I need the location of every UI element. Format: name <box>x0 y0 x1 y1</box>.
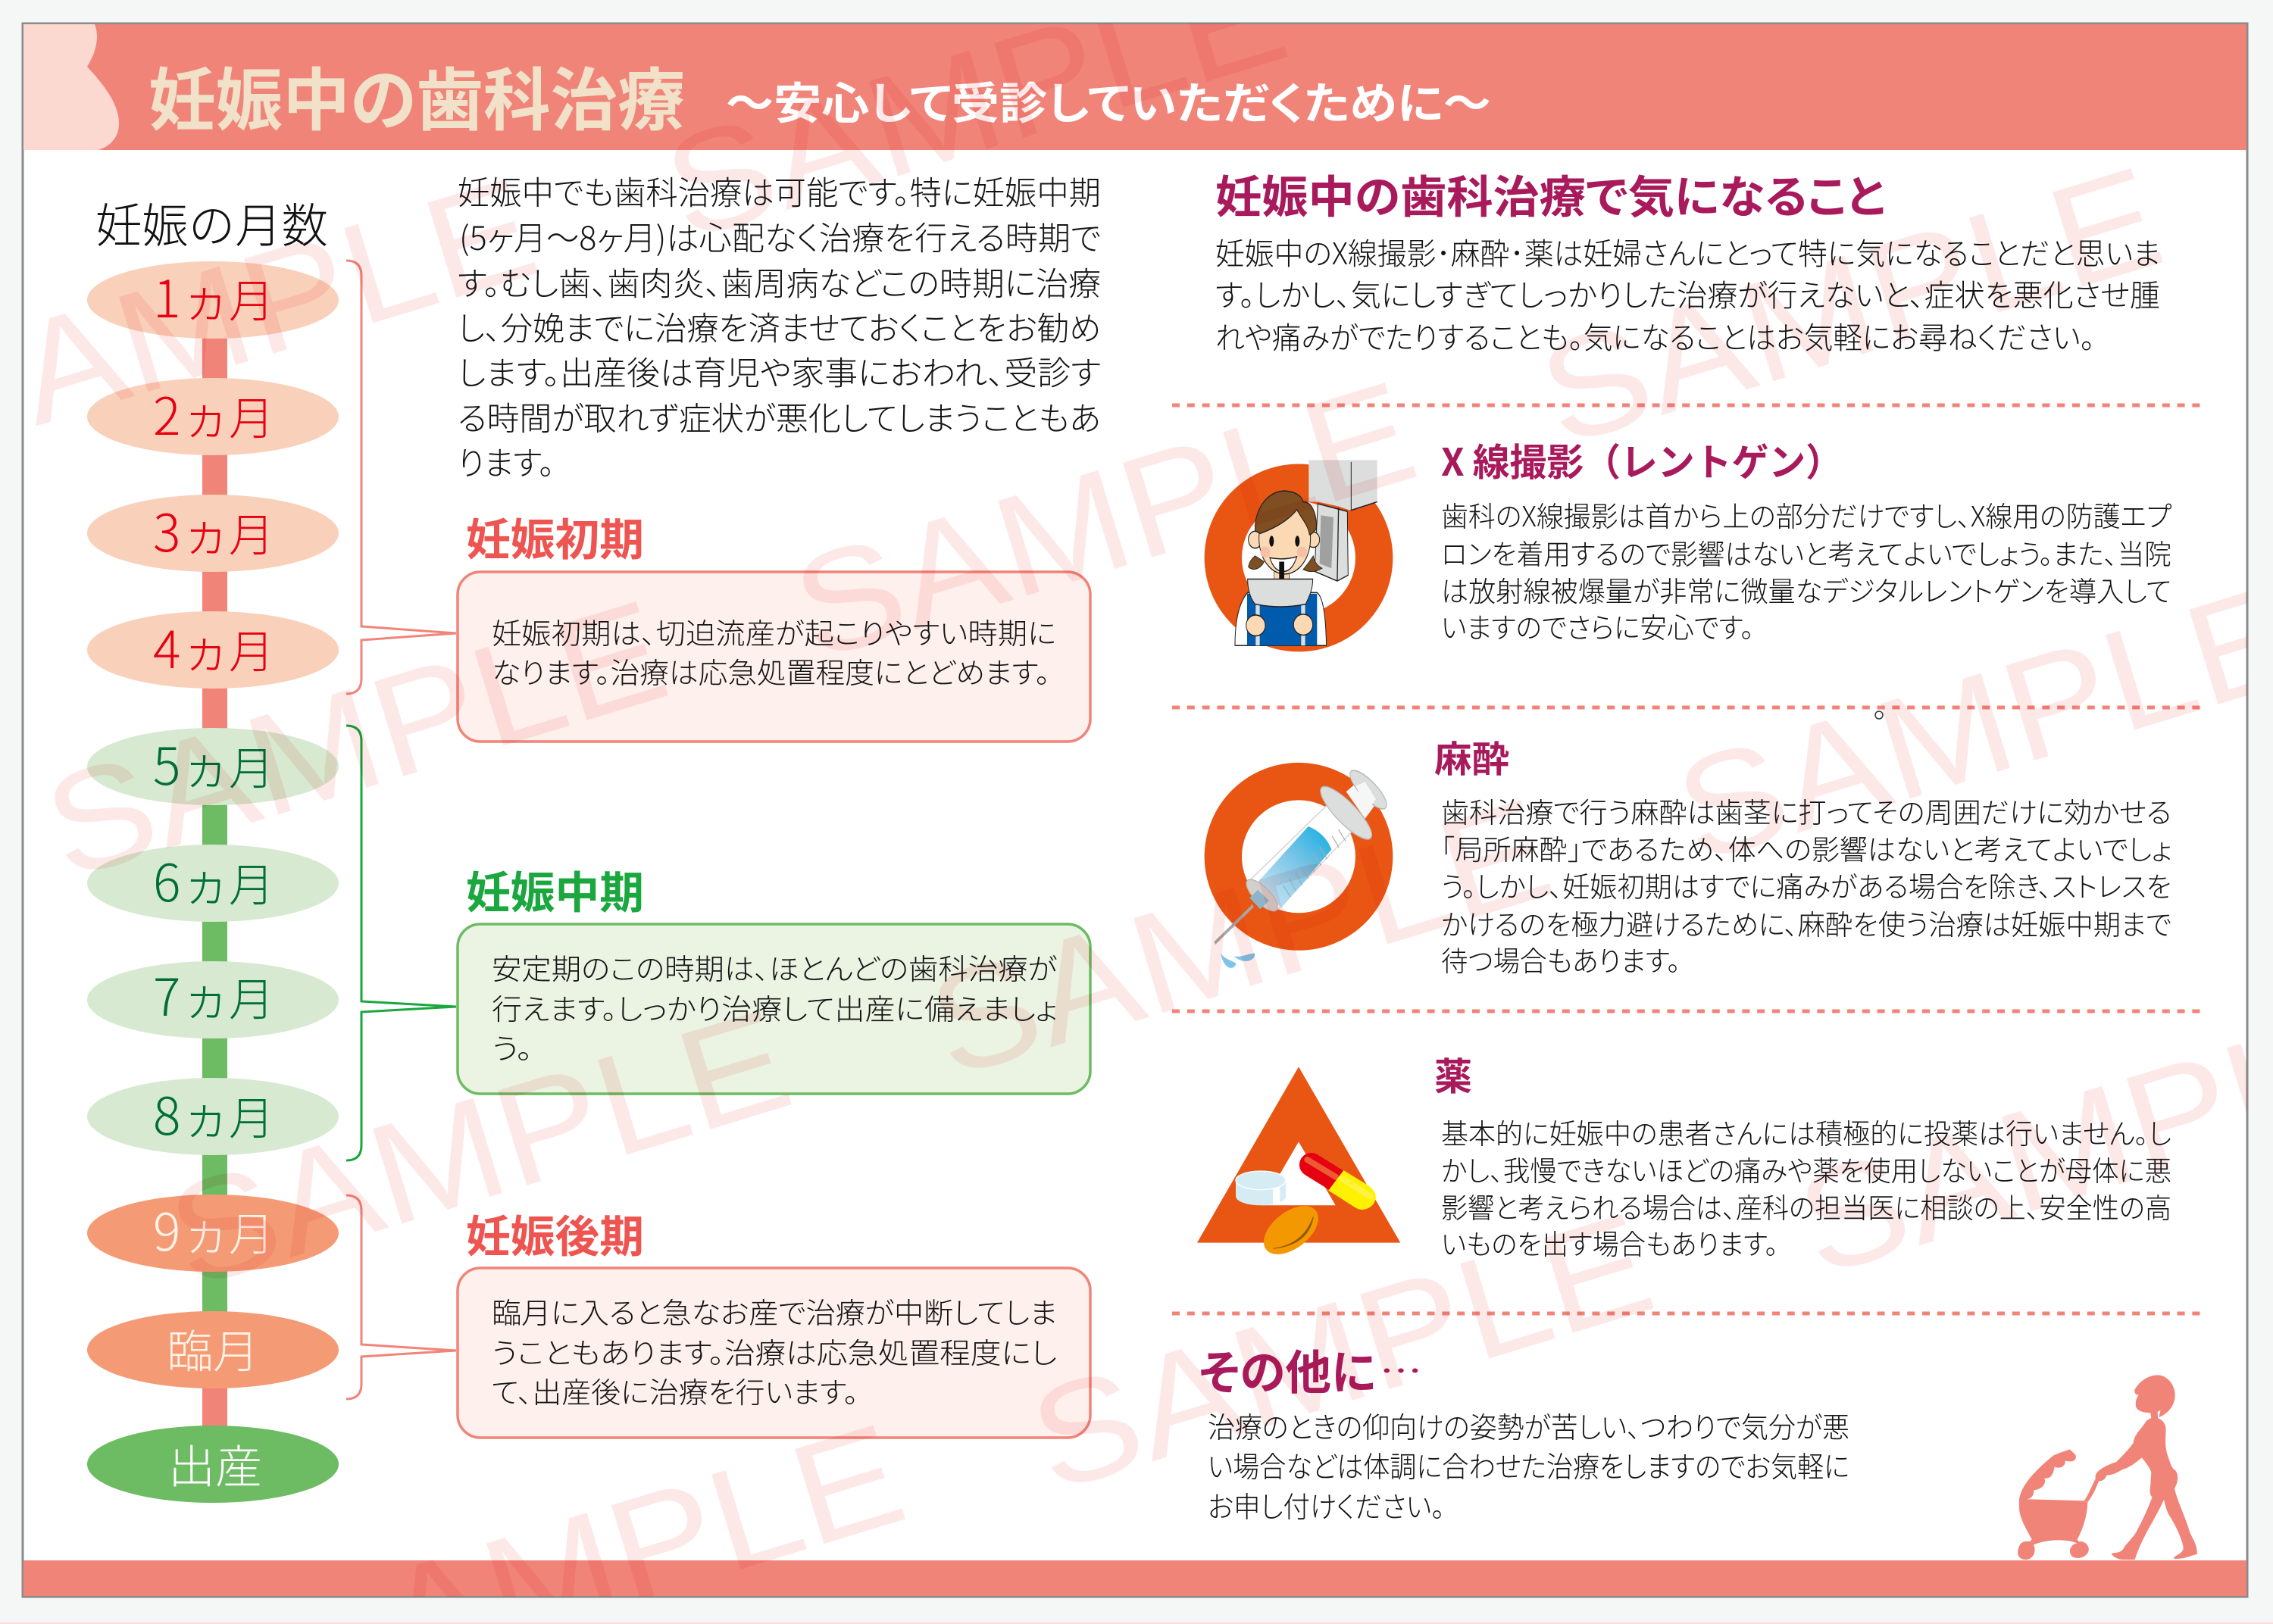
timeline spine <box>202 318 227 1439</box>
heading: concerns: 妊娠中の歯科治療で気になること <box>1215 161 1885 226</box>
callout text: early pregnancy <box>492 611 1056 692</box>
text: anesthesia <box>1441 790 2171 979</box>
heading: x-ray: X 線撮影（レントゲン） <box>1441 433 1843 487</box>
text: anesthesia: 歯科治療で行う麻酔は歯茎に打ってその周囲だけに効かせる <box>1441 790 2171 831</box>
icon: medicine with triangle <box>1197 1067 1400 1264</box>
month ovals: first trimester: 2 <box>153 375 180 450</box>
month ovals: first trimester: 4 <box>153 608 180 683</box>
footer band <box>23 1560 2246 1596</box>
heading: medicine: 薬 <box>1434 1047 1472 1101</box>
bracket: first trimester <box>346 261 456 694</box>
month ovals: second trimester: 月 <box>229 732 274 798</box>
month ovals: third trimester and birth: 出産 <box>168 1431 262 1497</box>
intro paragraph: (5ヶ月～8ヶ月)は心配なく治療を行える時期で <box>459 213 1101 260</box>
month ovals: third trimester and birth: 月 <box>229 1198 274 1264</box>
text: medicine <box>1441 1111 2171 1263</box>
intro paragraph: る時間が取れず症状が悪化してしまうこともあ <box>458 393 1101 440</box>
text: medicine: かし、我慢できないほどの痛みや薬を使用しないことが母体に悪 <box>1441 1148 2171 1189</box>
month ovals: third trimester and birth: 臨月 <box>167 1316 259 1382</box>
callout text: early pregnancy: なります。治療は応急処置程度にとどめます。 <box>492 650 1050 692</box>
month ovals: second trimester: 5 <box>153 725 180 800</box>
month ovals: second trimester: 月 <box>229 963 274 1029</box>
right section: concerns intro <box>1215 161 2160 358</box>
callout text: late pregnancy: 臨月に入ると急なお産で治療が中断してしま <box>492 1290 1057 1332</box>
panel: early pregnancy <box>458 504 1090 742</box>
heading ellipsis: … <box>1380 1344 1422 1393</box>
subtitle: ～安心して受診していただくために～ <box>726 68 1491 132</box>
text: x-ray: ロンを着用するので影響はないと考えてよいでしょう。また、当院 <box>1441 532 2171 573</box>
callout text: mid pregnancy <box>492 946 1057 1067</box>
month ovals: second trimester: ヵ <box>182 1079 230 1149</box>
text: anesthesia: かけるのを極力避けるために、麻酔を使う治療は妊娠中期まで <box>1441 902 2171 943</box>
month ovals: second trimester: 7 <box>153 956 180 1031</box>
callout text: mid pregnancy: 安定期のこの時期は、ほとんどの歯科治療が <box>492 946 1057 988</box>
heading: other: その他に <box>1199 1335 1376 1403</box>
month ovals: first trimester: 月 <box>229 499 274 565</box>
watermark: SAMPLE repeated: SAMPLE <box>1523 136 2178 476</box>
month ovals: first trimester: 月 <box>229 265 274 331</box>
small stray circle mark <box>1875 711 1883 719</box>
watermark: SAMPLE repeated: SAMPLE <box>777 351 1432 690</box>
callout text: late pregnancy: て、出産後に治療を行います。 <box>492 1369 858 1411</box>
intro paragraph: 妊娠中でも歯科治療は可能です。特に妊娠中期 <box>458 167 1101 214</box>
text: x-ray: いますのでさらに安心です。 <box>1441 605 1754 646</box>
callout text: late pregnancy <box>492 1290 1057 1411</box>
watermark: SAMPLE repeated: SAMPLE <box>28 570 683 909</box>
watermark: SAMPLE repeated: SAMPLE <box>152 979 807 1318</box>
section: medicine <box>1434 1047 2171 1263</box>
intro paragraph: します。出産後は育児や家事におわれ、受診す <box>458 348 1101 395</box>
icon: syringe with circle <box>1205 763 1393 968</box>
concerns text: 妊娠中のX線撮影･麻酔･薬は妊婦さんにとって特に気になることだと思いま <box>1215 230 2160 273</box>
icon: woman pushing stroller silhouette <box>2018 1375 2197 1560</box>
callout text: late pregnancy: うこともあります。治療は応急処置程度にし <box>492 1330 1057 1372</box>
intro paragraph: ります。 <box>458 438 555 485</box>
month ovals: second trimester: 8 <box>153 1075 180 1150</box>
text: anesthesia: 待つ場合もあります。 <box>1441 938 1681 979</box>
concerns text: れや痛みがでたりすることも。気になることはお気軽にお尋ねください。 <box>1215 314 2095 358</box>
month ovals: second trimester: ヵ <box>182 729 230 799</box>
section: x-ray <box>1441 433 2172 646</box>
heading: late pregnancy: 妊娠後期 <box>466 1201 644 1265</box>
text: x-ray: は放射線被爆量が非常に微量なデジタルレントゲンを導入して <box>1441 569 2171 610</box>
intro paragraph: し、分娩までに治療を済ませておくことをお勧め <box>458 303 1101 350</box>
section: other <box>1199 1335 1849 1526</box>
bracket: third trimester <box>346 1195 456 1399</box>
watermark: SAMPLE repeated: SAMPLE <box>1659 554 2273 893</box>
callout box: early pregnancy <box>458 572 1090 742</box>
section: anesthesia <box>1434 729 2171 979</box>
callout text: early pregnancy: 妊娠初期は、切迫流産が起こりやすい時期に <box>492 611 1056 652</box>
panel: late pregnancy <box>458 1201 1090 1438</box>
heading: early pregnancy: 妊娠初期 <box>466 504 644 568</box>
callout text: mid pregnancy: 行えます。しっかり治療して出産に備えましょ <box>492 986 1057 1028</box>
intro paragraph <box>458 167 1101 485</box>
watermark: SAMPLE repeated: SAMPLE <box>1014 1182 1669 1522</box>
month ovals: first trimester: 1 <box>153 258 180 333</box>
month ovals: second trimester <box>87 725 339 1155</box>
month ovals: first trimester: ヵ <box>182 613 230 682</box>
watermark: SAMPLE repeated: SAMPLE <box>912 768 1568 1107</box>
text: anesthesia: う。しかし、妊娠初期はすでに痛みがある場合を除き、ストレスを <box>1441 864 2171 905</box>
text: other: い場合などは体調に合わせた治療をしますのでお気軽に <box>1208 1444 1849 1485</box>
text: other: 治療のときの仰向けの姿勢が苦しい、つわりで気分が悪 <box>1208 1404 1849 1446</box>
month ovals: second trimester: 月 <box>229 1082 274 1148</box>
intro paragraph: す。むし歯、歯肉炎、歯周病などこの時期に治療 <box>458 258 1101 305</box>
month ovals: first trimester: ヵ <box>182 496 230 566</box>
month ovals: third trimester and birth: ヵ <box>182 1195 230 1265</box>
timeline heading: 妊娠の月数 <box>95 188 328 256</box>
text: medicine: 基本的に妊娠中の患者さんには積極的に投薬は行いません。し <box>1441 1111 2171 1152</box>
text: medicine: いものを出す場合もあります。 <box>1441 1222 1778 1263</box>
month ovals: first trimester: 月 <box>229 616 274 682</box>
month ovals: second trimester: 6 <box>153 842 180 917</box>
month ovals: third trimester and birth <box>87 1191 339 1503</box>
month ovals: first trimester: ヵ <box>182 379 230 449</box>
heading: anesthesia: 麻酔 <box>1434 729 1509 782</box>
text: x-ray: 歯科のX線撮影は首から上の部分だけですし、X線用の防護エプ <box>1441 494 2172 535</box>
icon: pregnant belly silhouette <box>23 24 119 150</box>
concerns text <box>1215 230 2160 358</box>
text: medicine: 影響と考えられる場合は、産科の担当医に相談の上、安全性の高 <box>1441 1185 2171 1226</box>
month ovals: first trimester: 3 <box>153 492 180 567</box>
month ovals: second trimester: 月 <box>229 849 274 915</box>
heading: mid pregnancy: 妊娠中期 <box>466 857 644 921</box>
header band <box>23 24 2246 150</box>
month ovals: first trimester <box>87 258 339 689</box>
text: anesthesia: ｢局所麻酔｣であるため、体への影響はないと考えてよいでしょ <box>1441 827 2171 868</box>
bracket: second trimester <box>346 726 456 1160</box>
month ovals: third trimester and birth: 9 <box>153 1191 180 1266</box>
callout box: late pregnancy <box>458 1268 1090 1438</box>
month ovals: first trimester: ヵ <box>182 262 230 332</box>
text: x-ray <box>1441 494 2172 646</box>
callout box: mid pregnancy <box>458 924 1090 1094</box>
icon: x-ray patient with circle <box>1205 460 1393 651</box>
concerns text: す。しかし、気にしすぎてしっかりした治療が行えないと、症状を悪化させ腫 <box>1215 271 2160 315</box>
month ovals: second trimester: ヵ <box>182 960 230 1030</box>
text: other <box>1208 1404 1849 1526</box>
callout text: mid pregnancy: う。 <box>492 1026 533 1067</box>
panel: mid pregnancy <box>458 857 1090 1094</box>
month ovals: second trimester: ヵ <box>182 846 230 916</box>
text: other: お申し付けください。 <box>1208 1484 1445 1526</box>
month ovals: first trimester: 月 <box>229 383 274 448</box>
title: 妊娠中の歯科治療 <box>149 45 685 144</box>
